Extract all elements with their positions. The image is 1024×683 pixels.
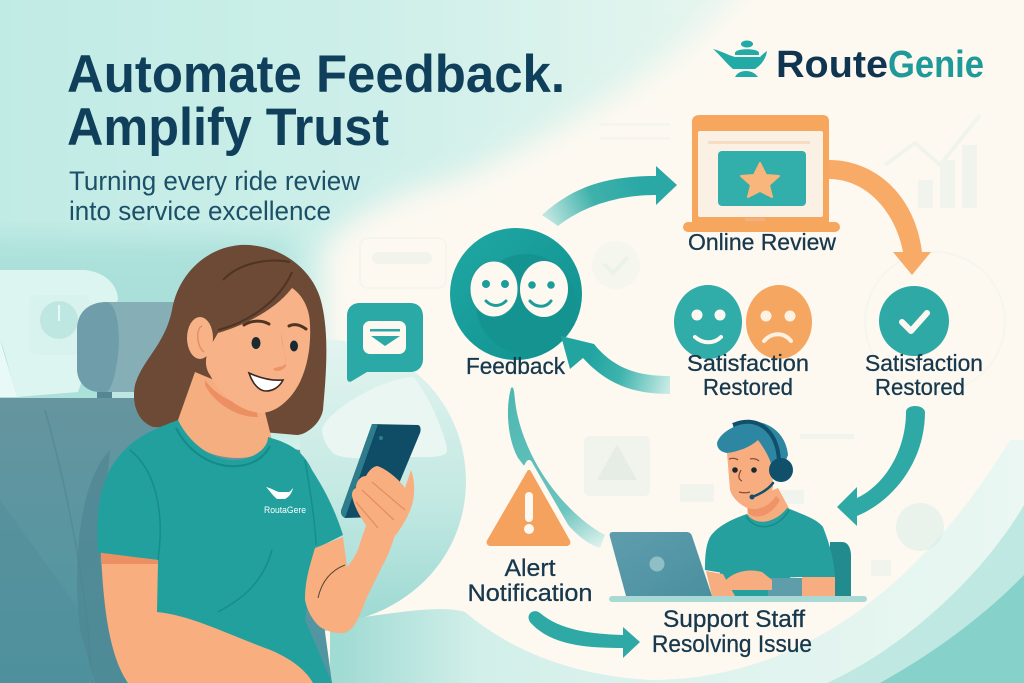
seat and headrest bbox=[0, 302, 332, 683]
label: online review: Online Review bbox=[688, 229, 836, 255]
hair strand bbox=[218, 261, 292, 330]
arrow: curve from feedback to staff bbox=[508, 387, 605, 548]
icon: feedback circle with faces bbox=[450, 228, 582, 360]
icon: chat bubble bbox=[347, 303, 423, 382]
face bbox=[206, 288, 310, 413]
car window with gauge bbox=[0, 270, 118, 397]
icon: check circle bbox=[879, 286, 949, 356]
label: satisfaction restored right: Satisfaction bbox=[865, 350, 983, 376]
logo wordmark: Genie bbox=[888, 44, 984, 86]
neck bbox=[178, 372, 272, 458]
icon: genie lamp bbox=[713, 40, 767, 77]
logo: RouteGenie bbox=[713, 40, 984, 86]
label: support staff resolving issue: Support Staff bbox=[663, 606, 805, 633]
hair back bbox=[733, 421, 788, 470]
shirt bbox=[705, 508, 835, 578]
headset bbox=[733, 422, 779, 462]
laptop bbox=[610, 532, 712, 596]
subtitle: into service excellence bbox=[69, 196, 331, 226]
eyebrows bbox=[244, 321, 306, 329]
title: Amplify Trust bbox=[67, 98, 389, 157]
person: woman with phone bbox=[97, 245, 421, 683]
nose bbox=[273, 333, 286, 371]
desk bbox=[609, 596, 867, 602]
label: support staff resolving issue bbox=[652, 606, 812, 658]
label: alert notification: Notification bbox=[468, 580, 592, 607]
label: feedback: Feedback bbox=[466, 353, 565, 379]
ear bbox=[187, 317, 213, 359]
label: satisfaction restored center bbox=[687, 350, 809, 400]
faint background icons bbox=[360, 115, 1005, 576]
t-shirt bbox=[97, 420, 343, 683]
hair fringe bbox=[717, 422, 758, 453]
arms bbox=[706, 571, 735, 596]
phone bbox=[341, 424, 421, 518]
subtitle bbox=[69, 166, 360, 226]
arrow: alert to support staff bbox=[529, 611, 640, 658]
label: satisfaction restored center: Satisfaction bbox=[687, 350, 809, 376]
shirt logo bbox=[264, 487, 306, 516]
face bbox=[727, 440, 773, 509]
label: satisfaction restored right: Restored bbox=[875, 374, 965, 400]
label: satisfaction restored right bbox=[865, 350, 983, 400]
arrow: satisfaction to feedback bbox=[561, 336, 670, 394]
right arm bbox=[305, 520, 400, 633]
label: alert notification bbox=[468, 555, 592, 607]
arrow: online review to satisfaction bbox=[829, 160, 931, 275]
arrow: satisfaction to support staff bbox=[837, 406, 925, 526]
title bbox=[67, 45, 565, 157]
eyes bbox=[252, 337, 260, 349]
neck bbox=[747, 488, 790, 528]
hand bbox=[352, 466, 414, 535]
chair bbox=[830, 542, 851, 597]
title: Automate Feedback. bbox=[67, 45, 565, 104]
hair bbox=[134, 245, 326, 435]
person: support staff bbox=[609, 421, 867, 602]
label: satisfaction restored center: Restored bbox=[703, 374, 793, 400]
icon: happy and sad faces bbox=[674, 285, 812, 359]
label: support staff resolving issue: Resolving Issue bbox=[652, 631, 812, 658]
arrow: feedback to online review bbox=[542, 166, 677, 226]
icon: laptop online review bbox=[683, 115, 840, 232]
shirt logo: RoutaGere bbox=[264, 505, 306, 516]
left arm bbox=[101, 553, 313, 683]
icon: warning triangle bbox=[480, 463, 578, 548]
label: alert notification: Alert bbox=[504, 555, 556, 582]
logo wordmark: Route bbox=[776, 44, 888, 86]
mouth bbox=[249, 373, 283, 391]
subtitle: Turning every ride review bbox=[69, 166, 360, 196]
